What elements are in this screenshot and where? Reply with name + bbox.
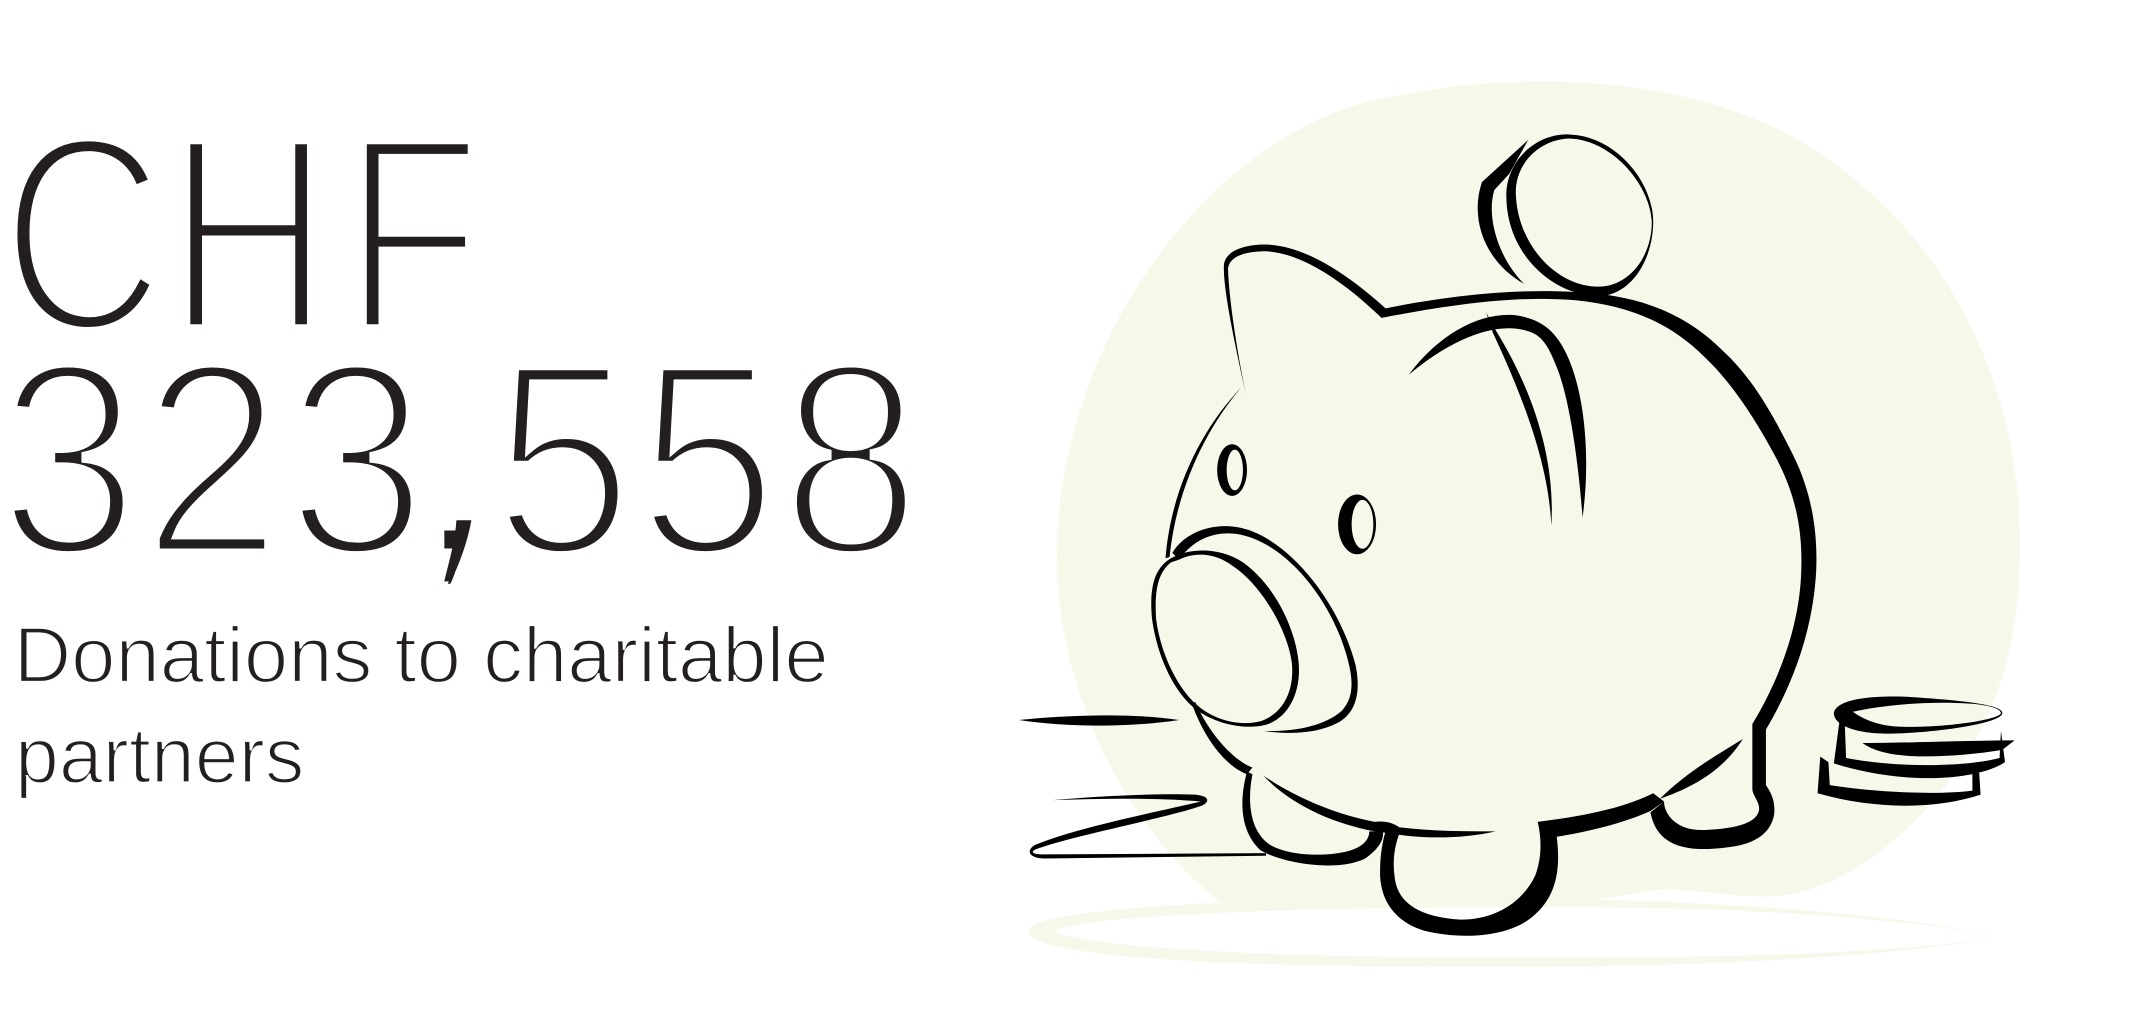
speed line zigzag	[1030, 794, 1266, 859]
haunch line	[1660, 739, 1743, 799]
belly edge and middle leg	[1380, 793, 1664, 936]
amount comma stroke	[444, 520, 471, 581]
ground ring shadow	[1028, 898, 1997, 967]
ear and back outline	[1224, 245, 1816, 849]
motion lines	[1019, 715, 1266, 859]
chest line	[1191, 702, 1252, 774]
caption line 1: Donations to charitable	[14, 611, 829, 699]
right eye	[1338, 494, 1376, 554]
coin slot inner line	[1486, 312, 1552, 526]
icon: stack of coins	[1818, 697, 2015, 806]
icon: piggy bank	[1151, 134, 1816, 936]
amount value: 323,558: 323,558	[0, 306, 921, 614]
bottom coin	[1818, 757, 1981, 806]
coin face	[1506, 134, 1653, 296]
coin edge	[1478, 140, 1528, 284]
heading: amount and caption	[0, 78, 921, 799]
speed line top	[1019, 715, 1179, 726]
caption line 2: partners	[15, 711, 304, 799]
coin slot outer line	[1409, 315, 1586, 518]
snout	[1151, 551, 1299, 727]
head line	[1166, 387, 1242, 558]
coin crescent	[1862, 740, 2015, 756]
front left leg	[1242, 772, 1383, 865]
top coin	[1834, 697, 2002, 734]
amount currency: CHF: CHF	[1, 78, 481, 389]
snout rim	[1172, 526, 1358, 733]
belly line	[1263, 776, 1496, 837]
left eye	[1217, 444, 1247, 496]
middle coin	[1834, 723, 2005, 778]
background blob	[1057, 82, 2020, 902]
